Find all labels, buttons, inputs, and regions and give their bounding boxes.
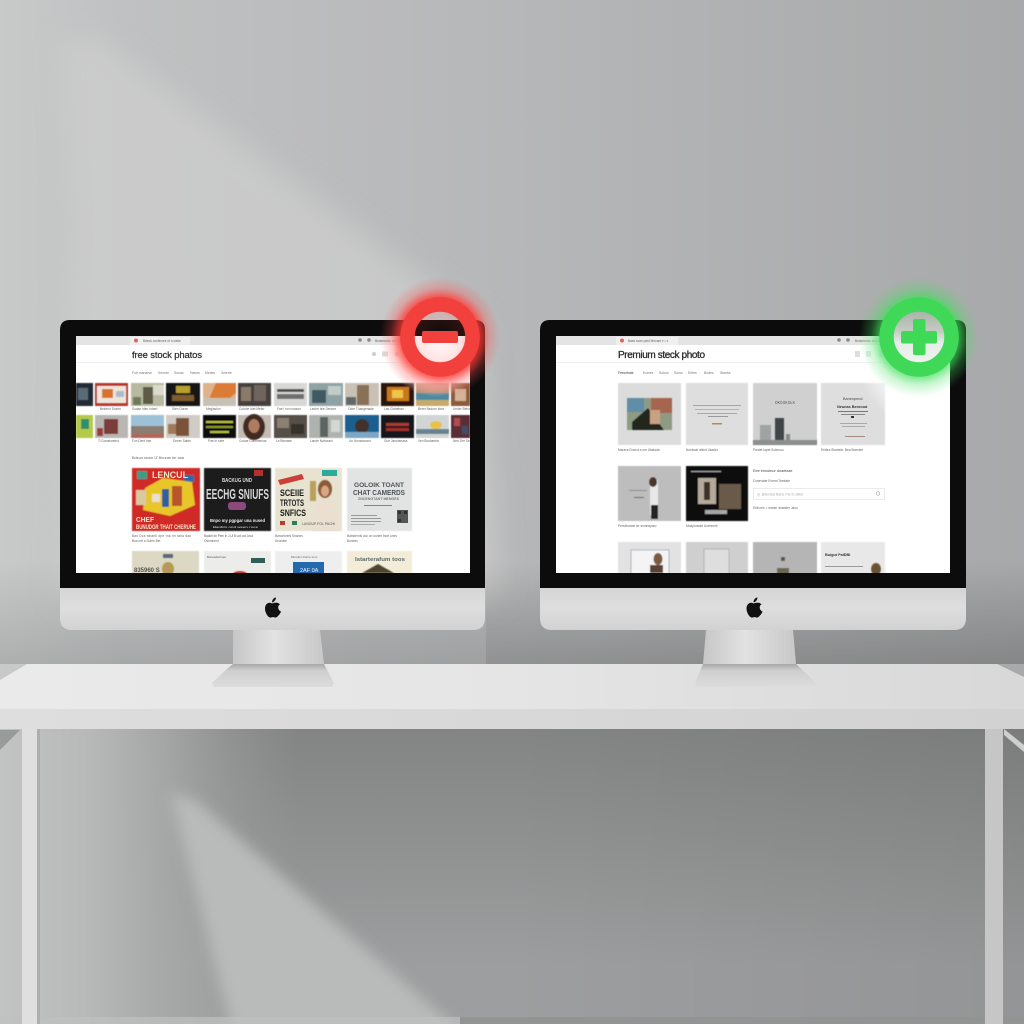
strip captions row 2: Un Nonaborant [349, 439, 371, 443]
search panel: Cosevater Evernt Teetrate [753, 479, 790, 483]
stand [212, 630, 334, 687]
photo card 4: Banenpend [843, 397, 862, 401]
poster captions [132, 534, 397, 542]
strip captions row 1: Cutuhe Idet Meter [239, 407, 265, 411]
poster 4: grey typographic [347, 468, 412, 531]
nav tabs: Stanbs [720, 371, 731, 375]
browser bar [76, 336, 400, 345]
grid captions row 1: Marave Enond a ore Ukatoab [618, 448, 660, 452]
poster 3: cream with woman: LUNGUP FOL PACHI [302, 521, 335, 526]
browser bar: Bass scan pant Mecant v ▪ ▾ [628, 339, 669, 343]
strip captions row 1: Under Benoa [453, 407, 472, 411]
poster 2: dark chalk: Bnpo my pgpgar una nused [210, 518, 265, 523]
photo card 2 [686, 383, 748, 445]
nav tabs: Fub manarse [132, 371, 152, 375]
strip captions row 2: Gue Janotenasa [384, 439, 408, 443]
strip captions row 2: Lande Nahorani [310, 439, 333, 443]
photo grid row 3 [618, 542, 885, 575]
photo card 4: Neunas Benrood [837, 405, 868, 409]
poster 2: dark chalk: EECHG SNIUFS [206, 486, 269, 503]
strip captions row 1: Meglavion [206, 407, 221, 411]
table front edge [0, 709, 1024, 729]
nav tabs: Selerte [221, 371, 232, 375]
apple logo [746, 598, 762, 618]
left iMac: free stock photos [60, 277, 500, 687]
grid captions row 1: Nueboat Ietkot Ukadet [686, 448, 718, 452]
bezel [540, 320, 966, 588]
poster 4: grey typographic: GOLOIK TOANT [354, 482, 404, 489]
header icons and divider [556, 351, 878, 363]
poster 2: dark chalk: BACKUG UND [222, 478, 252, 484]
nav tabs: Extnes [643, 371, 654, 375]
strip captions row 1: Sten Dorse [172, 407, 188, 411]
section heading: Bdeun seom IZ Beuran ter aoa [132, 456, 185, 460]
grid captions row 2: Mnaporadet Ucehnerlr [686, 524, 719, 528]
chin [60, 586, 485, 630]
nav tabs [132, 372, 232, 374]
strip captions row 2: Nen Oer Sene [453, 439, 474, 443]
strip captions row 1: Bekend Dosen [100, 407, 121, 411]
strip captions row 1: Sudan Iden Inhert [132, 407, 157, 411]
strip captions row 1: Oder Thangenade [348, 407, 374, 411]
poster 2: dark chalk [204, 468, 271, 531]
poster 3: cream with woman: SNFICS [280, 508, 306, 519]
nav tabs: Bodes [704, 371, 714, 375]
photo grid row 2 [618, 466, 884, 521]
grid captions row 2: Penuthande ier somnaparu [618, 524, 657, 528]
strip captions row 2: Le Benawe [276, 439, 292, 443]
white wash under badge [386, 336, 469, 396]
search panel: Edit nrin = maner dnabder Jaoo [753, 506, 798, 510]
browser bar: Bdeck continues of a visite [143, 339, 181, 343]
poster 1: red [132, 468, 200, 531]
screen [76, 336, 470, 573]
nav tabs: Sohns [659, 371, 669, 375]
browser bar: Bookmarks and more [375, 339, 406, 343]
strip captions row 2: Fun Dent Inte [132, 439, 152, 443]
photo grid row 1 [618, 383, 885, 445]
strip captions row 2: Dener Sabtn [173, 439, 191, 443]
poster 1 text [136, 470, 196, 531]
poster captions: Badoh dn Pern in J Ul B uot oot Jvoa [204, 534, 253, 538]
bottom poster row: Istarterafum toos [355, 557, 405, 563]
bottom poster row [132, 550, 412, 573]
chin [540, 586, 966, 630]
bottom poster row: 835960 S [134, 568, 160, 574]
bottom poster row: Bunesdat Isen [207, 555, 227, 559]
table [0, 664, 1024, 1024]
poster captions: Osemnent [204, 539, 219, 543]
strip captions row 2: Codue Connmenas [239, 439, 267, 443]
strip captions row 1: Berer Bekorn Idea [418, 407, 444, 411]
apple logo [265, 598, 281, 618]
poster 3: cream with woman: SCEIIE [280, 488, 304, 499]
thumbnail strip row 1 [76, 383, 470, 406]
photo card: woman [618, 466, 681, 521]
poster captions: Bas Dva mbanil dpe tna rm taha dad [132, 534, 191, 538]
search panel: Eee ennutnur dnaetzae [753, 469, 792, 473]
minus badge [408, 304, 472, 370]
strip captions row 1: Las Clatreban [384, 407, 404, 411]
bottom poster row: Mondun Durne tons [291, 555, 318, 559]
poster 1 text: CHEF [136, 517, 155, 524]
poster 4: grey typographic: CHAT CAMERDS [353, 490, 405, 497]
nav tabs: Sonas [174, 371, 184, 375]
nav tabs: Enfes [688, 371, 697, 375]
grid captions row 1 [618, 448, 863, 452]
poster 1 text: BUNUDGR THAIT CHERUHE [136, 524, 196, 531]
grid captions row 2 [618, 524, 718, 528]
poster 3: cream with woman [275, 468, 342, 531]
poster captions: Bonbes [347, 539, 358, 543]
search box: Q ,Bitendat Bane rhe fo atker [757, 492, 804, 496]
search panel [753, 469, 884, 510]
poster 3: cream with woman: TRTOTS [280, 498, 304, 509]
photo grid row 3: Bulgut PaIDBI [825, 553, 850, 557]
strip captions row 1: Fae I non mason [277, 407, 301, 411]
table top [0, 664, 1024, 709]
header icons and divider [76, 352, 400, 363]
page title: Premium steck photo [618, 350, 705, 361]
grid captions row 1: Eetbra Shartele. Bea Bnenlee [821, 448, 863, 452]
red glow wash [380, 277, 500, 397]
photo card 1 [618, 383, 681, 445]
nav tabs: Hanes [190, 371, 200, 375]
photo card: dark still life [686, 466, 748, 521]
photo card 3 [753, 383, 817, 445]
browser bar: Bookmarks and more [855, 339, 886, 343]
strip captions row 2: Pae In sete [208, 439, 224, 443]
screen [556, 336, 950, 573]
poster captions: Banonkreni Shanes [275, 534, 303, 538]
strip captions row 2: Tl Donabvated [98, 439, 119, 443]
QR code [397, 510, 408, 523]
table legs [0, 729, 1024, 1024]
nav tabs: Seoran [158, 371, 169, 375]
bezel [60, 320, 485, 588]
poster 2: dark chalk: Bankin ond ween roce [213, 525, 258, 529]
strip captions row 1 [100, 408, 470, 411]
bottom poster row: 2AF 0A [300, 568, 319, 574]
photo card 4 [821, 383, 885, 445]
nav tabs: Sonrs [674, 371, 683, 375]
poster 1 text: LENCUL [152, 470, 188, 480]
white wash under badge [857, 292, 993, 428]
nav tabs: Medes [205, 371, 215, 375]
poster captions: Batndmnis ooc on ounen tnort unes [347, 534, 397, 538]
poster captions: Boa oet a Sutris Bet [132, 539, 160, 543]
photo card 3: DKGSKGLK [775, 400, 795, 405]
green glow wash [859, 277, 979, 397]
page title: free stock phatos [132, 350, 202, 361]
plus badge [886, 304, 952, 370]
nav tabs: Fenorhote [618, 371, 634, 375]
nav tabs [618, 372, 730, 374]
thumbnail strip row 2 [76, 414, 470, 440]
browser bar [556, 336, 880, 345]
right iMac: premium stock photo [540, 277, 993, 687]
strip captions row 2 [98, 440, 470, 442]
strip captions row 1: Leuhe Isle Denber [310, 407, 337, 411]
poster 4: grey typographic: ZNCENGTANT MENGES [358, 497, 400, 501]
poster captions: Seunate [275, 539, 287, 543]
stand [695, 630, 816, 687]
grid captions row 1: Pardet Iapet Sclernuo [753, 448, 784, 452]
strip captions row 2: Ven Bosbantar [418, 439, 440, 443]
